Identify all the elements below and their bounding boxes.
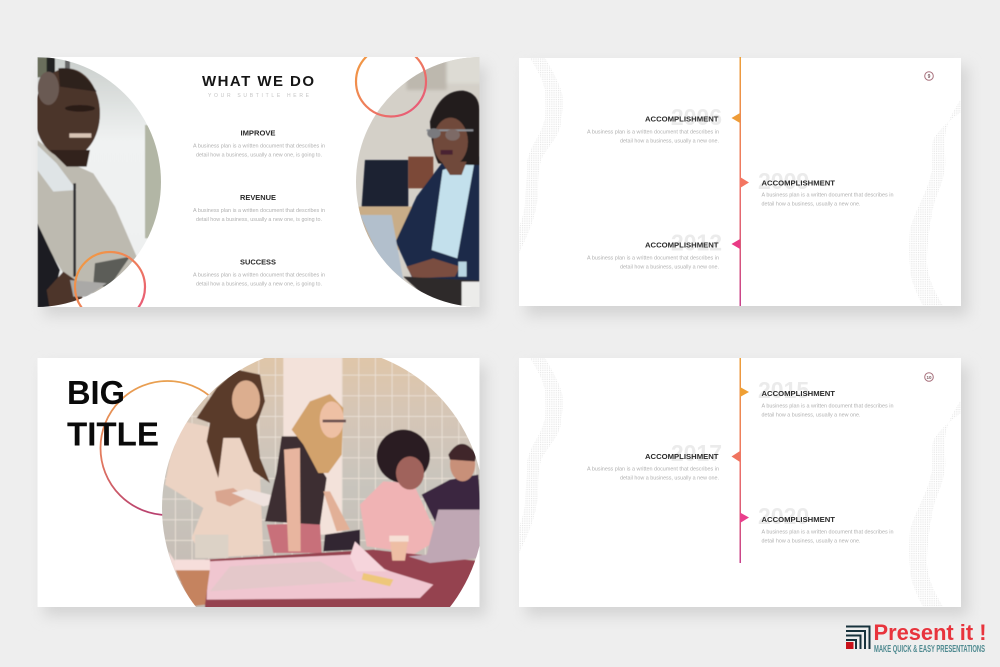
heading: title: TITLE <box>67 416 159 454</box>
photo: woman at laptop in circle <box>356 57 480 307</box>
marker 2020: detail how a business, usually a new one. <box>762 538 860 544</box>
text block: success: SUCCESS <box>240 258 276 266</box>
marker 2009: detail how a business, usually a new one. <box>762 202 860 208</box>
panel: what we do slide <box>38 57 480 307</box>
marker 2006: 2006 <box>671 104 722 130</box>
text block: revenue: REVENUE <box>240 193 276 202</box>
marker 2012 <box>587 230 740 270</box>
text block: success: detail how a business, usually a new one, is going to. <box>196 282 322 288</box>
slide shadows <box>44 66 968 616</box>
marker 2020: 2020 <box>758 503 809 529</box>
logo: present it <box>846 620 986 655</box>
text block: improve: IMPROVE <box>240 128 276 138</box>
text block: revenue <box>193 193 325 223</box>
page number icon <box>925 72 933 80</box>
decorative ring: bottom left <box>74 250 146 307</box>
marker 2012: 2012 <box>671 230 722 256</box>
page number icon <box>925 373 933 381</box>
marker 2015: ACCOMPLISHMENT <box>762 389 835 398</box>
marker 2017: A business plan is a written document that describes in <box>587 466 719 472</box>
marker 2009 <box>740 168 894 208</box>
marker 2009: 2009 <box>758 168 809 194</box>
marker 2009: ACCOMPLISHMENT <box>762 178 835 188</box>
panel: timeline 2015-2020 <box>519 358 961 607</box>
timeline line <box>740 57 741 306</box>
photo: team around table in circle <box>157 355 483 611</box>
text block: success <box>193 258 325 288</box>
decorative ring: top right <box>356 46 426 116</box>
marker 2015: detail how a business, usually a new one. <box>762 412 860 418</box>
text block: improve: detail how a business, usually a new one, is going to. <box>196 152 322 158</box>
subtitle: YOUR SUBTITLE HERE <box>208 93 310 99</box>
marker 2020 <box>740 503 894 544</box>
marker 2015: 2015 <box>758 377 809 403</box>
icon: logo mark <box>846 626 870 649</box>
marker 2012: A business plan is a written document that describes in <box>587 256 719 262</box>
marker 2006 <box>587 104 740 144</box>
logo wordmark: Present it ! <box>874 620 986 645</box>
heading: big title: BIG <box>67 375 125 412</box>
panel: timeline 2006-2012 <box>519 57 961 306</box>
marker 2006: ACCOMPLISHMENT <box>645 114 719 124</box>
marker 2017: ACCOMPLISHMENT <box>645 452 719 461</box>
page number icon: 9 <box>928 74 931 80</box>
photo: smiling man in circle <box>30 46 485 322</box>
text block: revenue: detail how a business, usually a new one, is going to. <box>196 217 322 223</box>
marker 2009: A business plan is a written document that describes in <box>762 192 894 198</box>
marker 2012: detail how a business, usually a new one. <box>620 264 719 270</box>
marker 2020: A business plan is a written document that describes in <box>762 530 894 536</box>
dotted wave: left <box>519 58 563 253</box>
heading: what we do: WHAT WE DO <box>202 73 314 90</box>
marker 2020: ACCOMPLISHMENT <box>762 515 835 524</box>
dotted wave: left <box>519 358 563 553</box>
marker 2006: detail how a business, usually a new one. <box>620 138 719 144</box>
marker 2012: ACCOMPLISHMENT <box>645 240 719 250</box>
timeline line <box>740 358 741 563</box>
decorative ring <box>100 381 234 515</box>
dotted wave: right <box>909 99 961 306</box>
text block: improve <box>193 128 325 158</box>
marker 2015: A business plan is a written document that describes in <box>762 404 894 410</box>
text block: improve: A business plan is a written document that describes in <box>193 144 325 150</box>
panel: big title slide <box>38 355 483 611</box>
marker 2017: 2017 <box>671 440 722 466</box>
marker 2017: detail how a business, usually a new one. <box>620 476 719 482</box>
marker 2017 <box>587 440 740 482</box>
marker 2015 <box>740 377 894 418</box>
text block: success: A business plan is a written document that describes in <box>193 272 325 278</box>
text block: revenue: A business plan is a written document that describes in <box>193 208 325 214</box>
dotted wave: right <box>909 400 961 607</box>
marker 2006: A business plan is a written document that describes in <box>587 130 719 136</box>
page number icon: 10 <box>926 375 932 380</box>
